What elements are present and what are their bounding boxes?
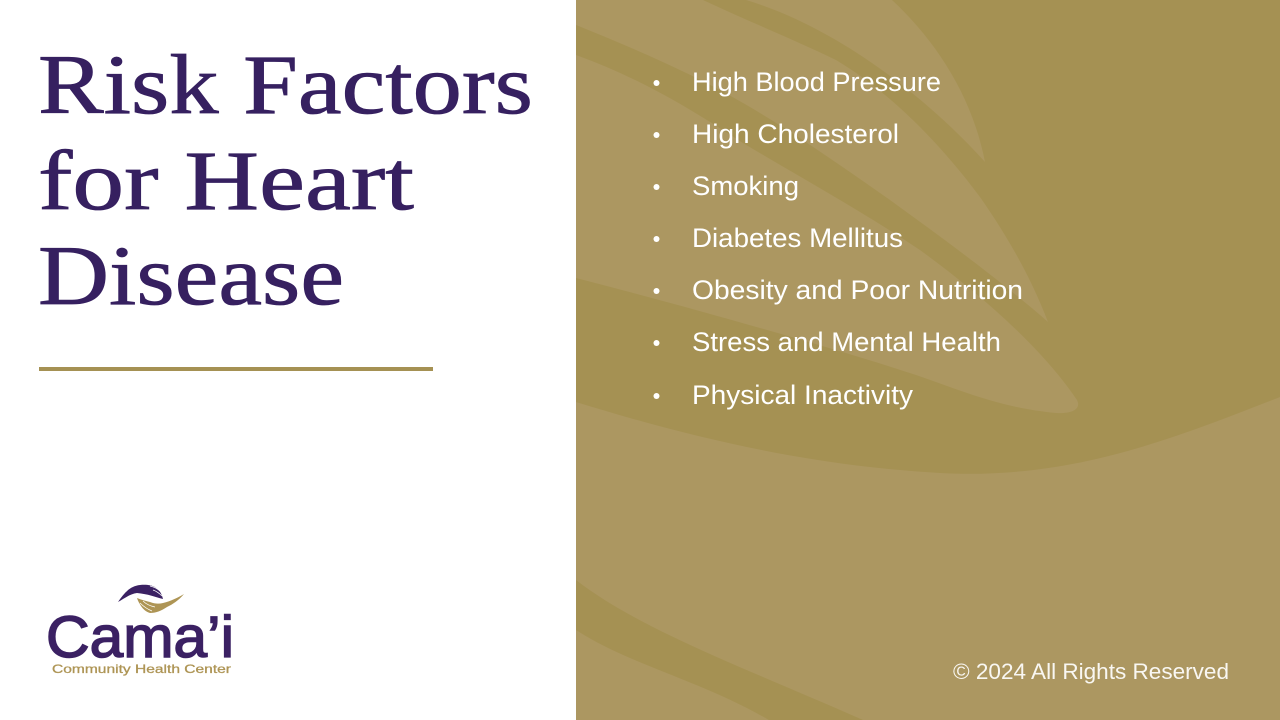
title	[38, 38, 533, 323]
item: high blood pressure: High Blood Pressure	[692, 67, 941, 97]
item: obesity and poor nutrition: Obesity and Poor Nutrition	[692, 275, 1023, 305]
logo wordmark: Cama’i	[46, 605, 234, 670]
item: high cholesterol: High Cholesterol	[692, 119, 899, 149]
logo tagline: Community Health Center	[52, 662, 231, 676]
title underline	[39, 367, 433, 371]
item: stress and mental health: Stress and Mental Health	[692, 327, 1001, 357]
item: diabetes mellitus: Diabetes Mellitus	[692, 223, 903, 253]
panel: right gold with leaf background	[576, 0, 1280, 720]
icon: gold swoosh	[137, 594, 184, 613]
item: smoking: Smoking	[692, 171, 799, 201]
item: physical inactivity: Physical Inactivity	[692, 380, 914, 410]
logo: Cama'i Community Health Center	[46, 585, 234, 676]
risk factor list	[654, 67, 1023, 410]
title: Disease	[38, 229, 344, 323]
panel: left white	[0, 0, 576, 720]
title: Risk Factors	[38, 38, 533, 132]
title: for Heart	[38, 134, 414, 228]
icon: purple swoosh	[118, 585, 163, 602]
copyright notice: © 2024 All Rights Reserved	[953, 659, 1229, 684]
